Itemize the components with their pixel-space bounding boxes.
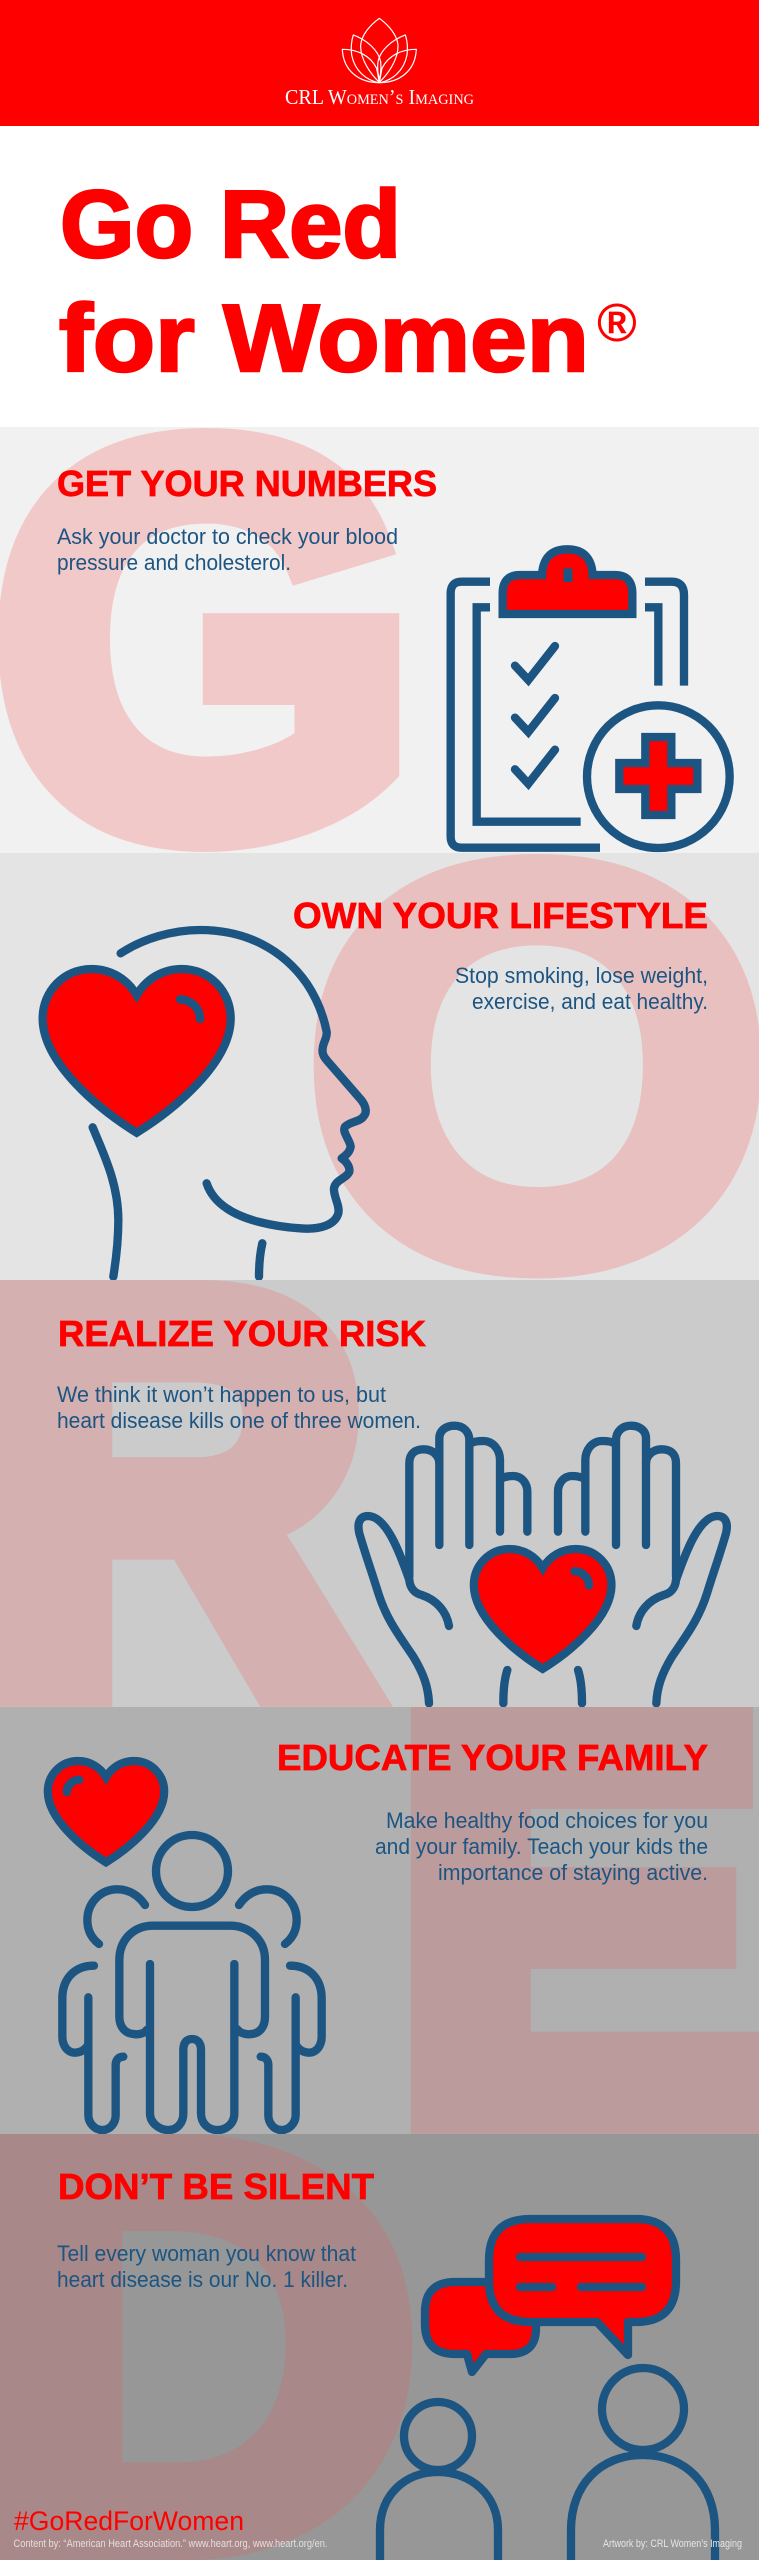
body text (455, 963, 708, 1014)
background letter G: G (0, 331, 417, 948)
body text: heart disease is our No. 1 killer. (57, 2267, 348, 2292)
background letter O: O (304, 753, 759, 1379)
body text: and your family. Teach your kids the (375, 1834, 708, 1859)
panel: get your numbers (0, 427, 759, 853)
background letter E: E (393, 1605, 759, 2233)
body text: Stop smoking, lose weight, (455, 963, 708, 988)
icon: clipboard with checks and medical cross (451, 549, 730, 848)
body text (57, 524, 398, 575)
title (0, 126, 759, 427)
body text: Ask your doctor to check your blood (57, 524, 398, 549)
title: ® (597, 293, 637, 353)
heading: EDUCATE YOUR FAMILY (277, 1737, 708, 1778)
body text: Make healthy food choices for you (386, 1808, 708, 1833)
hashtag: #GoRedForWomen (14, 2506, 244, 2536)
logo wordmark: CRL Women’s Imaging (285, 85, 474, 109)
heading: DON’T BE SILENT (58, 2166, 374, 2207)
header band with logo (0, 0, 759, 126)
body text: pressure and cholesterol. (57, 550, 291, 575)
icon: head profile with heart (43, 930, 366, 1277)
panel: don't be silent (0, 2134, 759, 2560)
icon: lotus logo (342, 18, 416, 83)
panel: realize your risk (0, 1280, 759, 1707)
panel: own your lifestyle (0, 853, 759, 1280)
heading: OWN YOUR LIFESTYLE (293, 895, 708, 936)
body text: exercise, and eat healthy. (472, 989, 708, 1014)
icon: family with heart (48, 1761, 322, 2130)
title: Go Red (60, 171, 401, 278)
body text: heart disease kills one of three women. (57, 1408, 421, 1433)
body text (57, 2241, 356, 2292)
panel: educate your family (0, 1707, 759, 2134)
body text (57, 1382, 421, 1433)
body text: We think it won’t happen to us, but (57, 1382, 386, 1407)
heading: GET YOUR NUMBERS (57, 463, 437, 504)
heading: REALIZE YOUR RISK (58, 1313, 426, 1354)
body text (375, 1808, 708, 1885)
title: for Women (59, 285, 589, 392)
body text: Tell every woman you know that (57, 2241, 356, 2266)
icon: two people talking with speech bubbles (380, 2219, 715, 2560)
content credit: Content by: “American Heart Association.” www.heart.org, www.heart.org/en. (14, 2538, 328, 2550)
icon: open hands holding heart (358, 1426, 727, 1703)
body text: importance of staying active. (438, 1860, 708, 1885)
